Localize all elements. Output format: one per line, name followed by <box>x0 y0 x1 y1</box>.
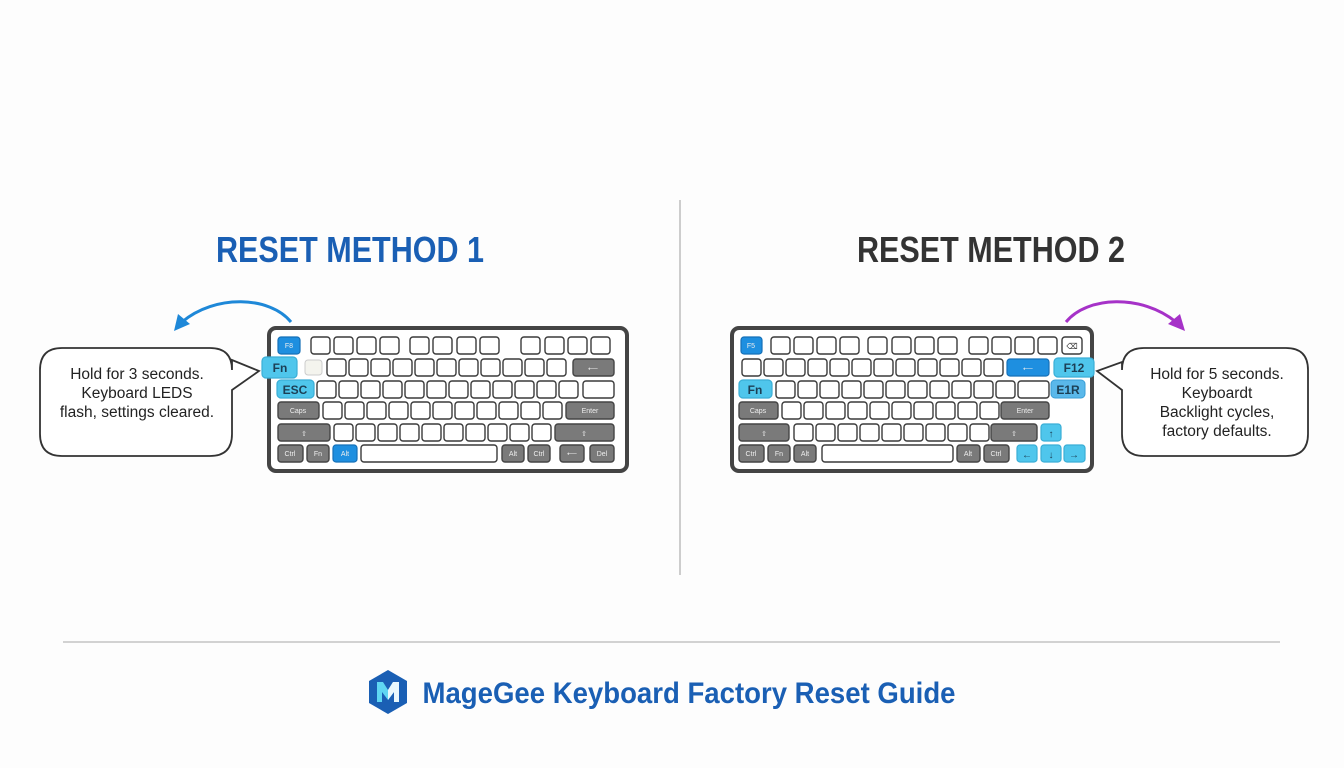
key: F12 highlighted <box>1054 358 1094 377</box>
arrow: blue curved <box>174 302 291 331</box>
keyboard 2: F5 <box>747 343 755 350</box>
keyboard 2: Alt <box>801 451 809 458</box>
callout: method 2: factory defaults. <box>1162 423 1272 440</box>
keyboard 2: ← <box>1022 450 1032 461</box>
arrow: purple curved <box>1066 302 1185 331</box>
callout: method 2: Hold for 5 seconds. <box>1150 366 1284 383</box>
callout: method 1: Hold for 3 seconds. <box>70 366 204 383</box>
keyboard 2: ↑ <box>1048 429 1054 440</box>
keyboard 2: ⟵ <box>1023 366 1033 373</box>
keyboard 1: Fn <box>314 451 322 458</box>
callout: method 1: Keyboard LEDS <box>81 385 193 402</box>
keyboard 2: ⇧ <box>761 430 767 438</box>
key: Fn highlighted: Fn <box>273 361 287 375</box>
key: Fn highlighted <box>739 380 772 398</box>
key: ESC highlighted <box>277 380 314 398</box>
callout: method 2: Backlight cycles, <box>1160 404 1274 421</box>
keyboard 2: ⇧ <box>1011 430 1017 438</box>
keyboard 2: Alt <box>964 451 972 458</box>
keyboard 1: Ctrl <box>285 451 296 458</box>
footer title: MageGee Keyboard Factory Reset Guide <box>422 677 956 710</box>
keyboard 1: F8 <box>285 343 293 350</box>
key: Fn highlighted: Fn <box>748 383 762 397</box>
keyboard 1: ⇧ <box>581 430 587 438</box>
keyboard 1: Ctrl <box>534 451 545 458</box>
keyboard 2: Caps <box>750 408 767 415</box>
key: F12 highlighted: F12 <box>1064 361 1085 375</box>
keyboard 1: ⟵ <box>567 451 577 458</box>
keyboard 1: Caps <box>290 408 307 415</box>
keyboard 1: Enter <box>582 408 599 415</box>
footer logo <box>369 670 407 714</box>
callout: method 2 <box>1097 348 1308 456</box>
keyboard 2: ↓ <box>1048 450 1054 461</box>
keyboard 1: Alt <box>509 451 517 458</box>
keyboard 2: Ctrl <box>991 451 1002 458</box>
title: reset method 1: RESET METHOD 1 <box>216 229 484 270</box>
keyboard 1: Alt <box>341 451 349 458</box>
keyboard 1: Del <box>597 451 608 458</box>
keyboard 2: Fn <box>775 451 783 458</box>
key: Fn highlighted <box>262 357 297 378</box>
keyboard 1: ⇧ <box>301 430 307 438</box>
keyboard 2 <box>732 328 1094 471</box>
callout: method 1: flash, settings cleared. <box>60 404 214 421</box>
key: E1R highlighted <box>1051 380 1085 398</box>
keyboard 2: → <box>1069 450 1079 461</box>
callout: method 2: Keyboardt <box>1182 385 1253 402</box>
key: ESC highlighted: ESC <box>283 383 308 397</box>
keyboard 2: Enter <box>1017 408 1034 415</box>
keyboard 1: ⟵ <box>588 366 598 373</box>
keyboard 2: Ctrl <box>746 451 757 458</box>
callout: method 1 <box>40 348 259 456</box>
keyboard 1 <box>262 328 627 471</box>
title: reset method 2: RESET METHOD 2 <box>857 229 1125 270</box>
keyboard 2: ⌫ <box>1066 342 1078 351</box>
key: E1R highlighted: E1R <box>1056 383 1080 397</box>
